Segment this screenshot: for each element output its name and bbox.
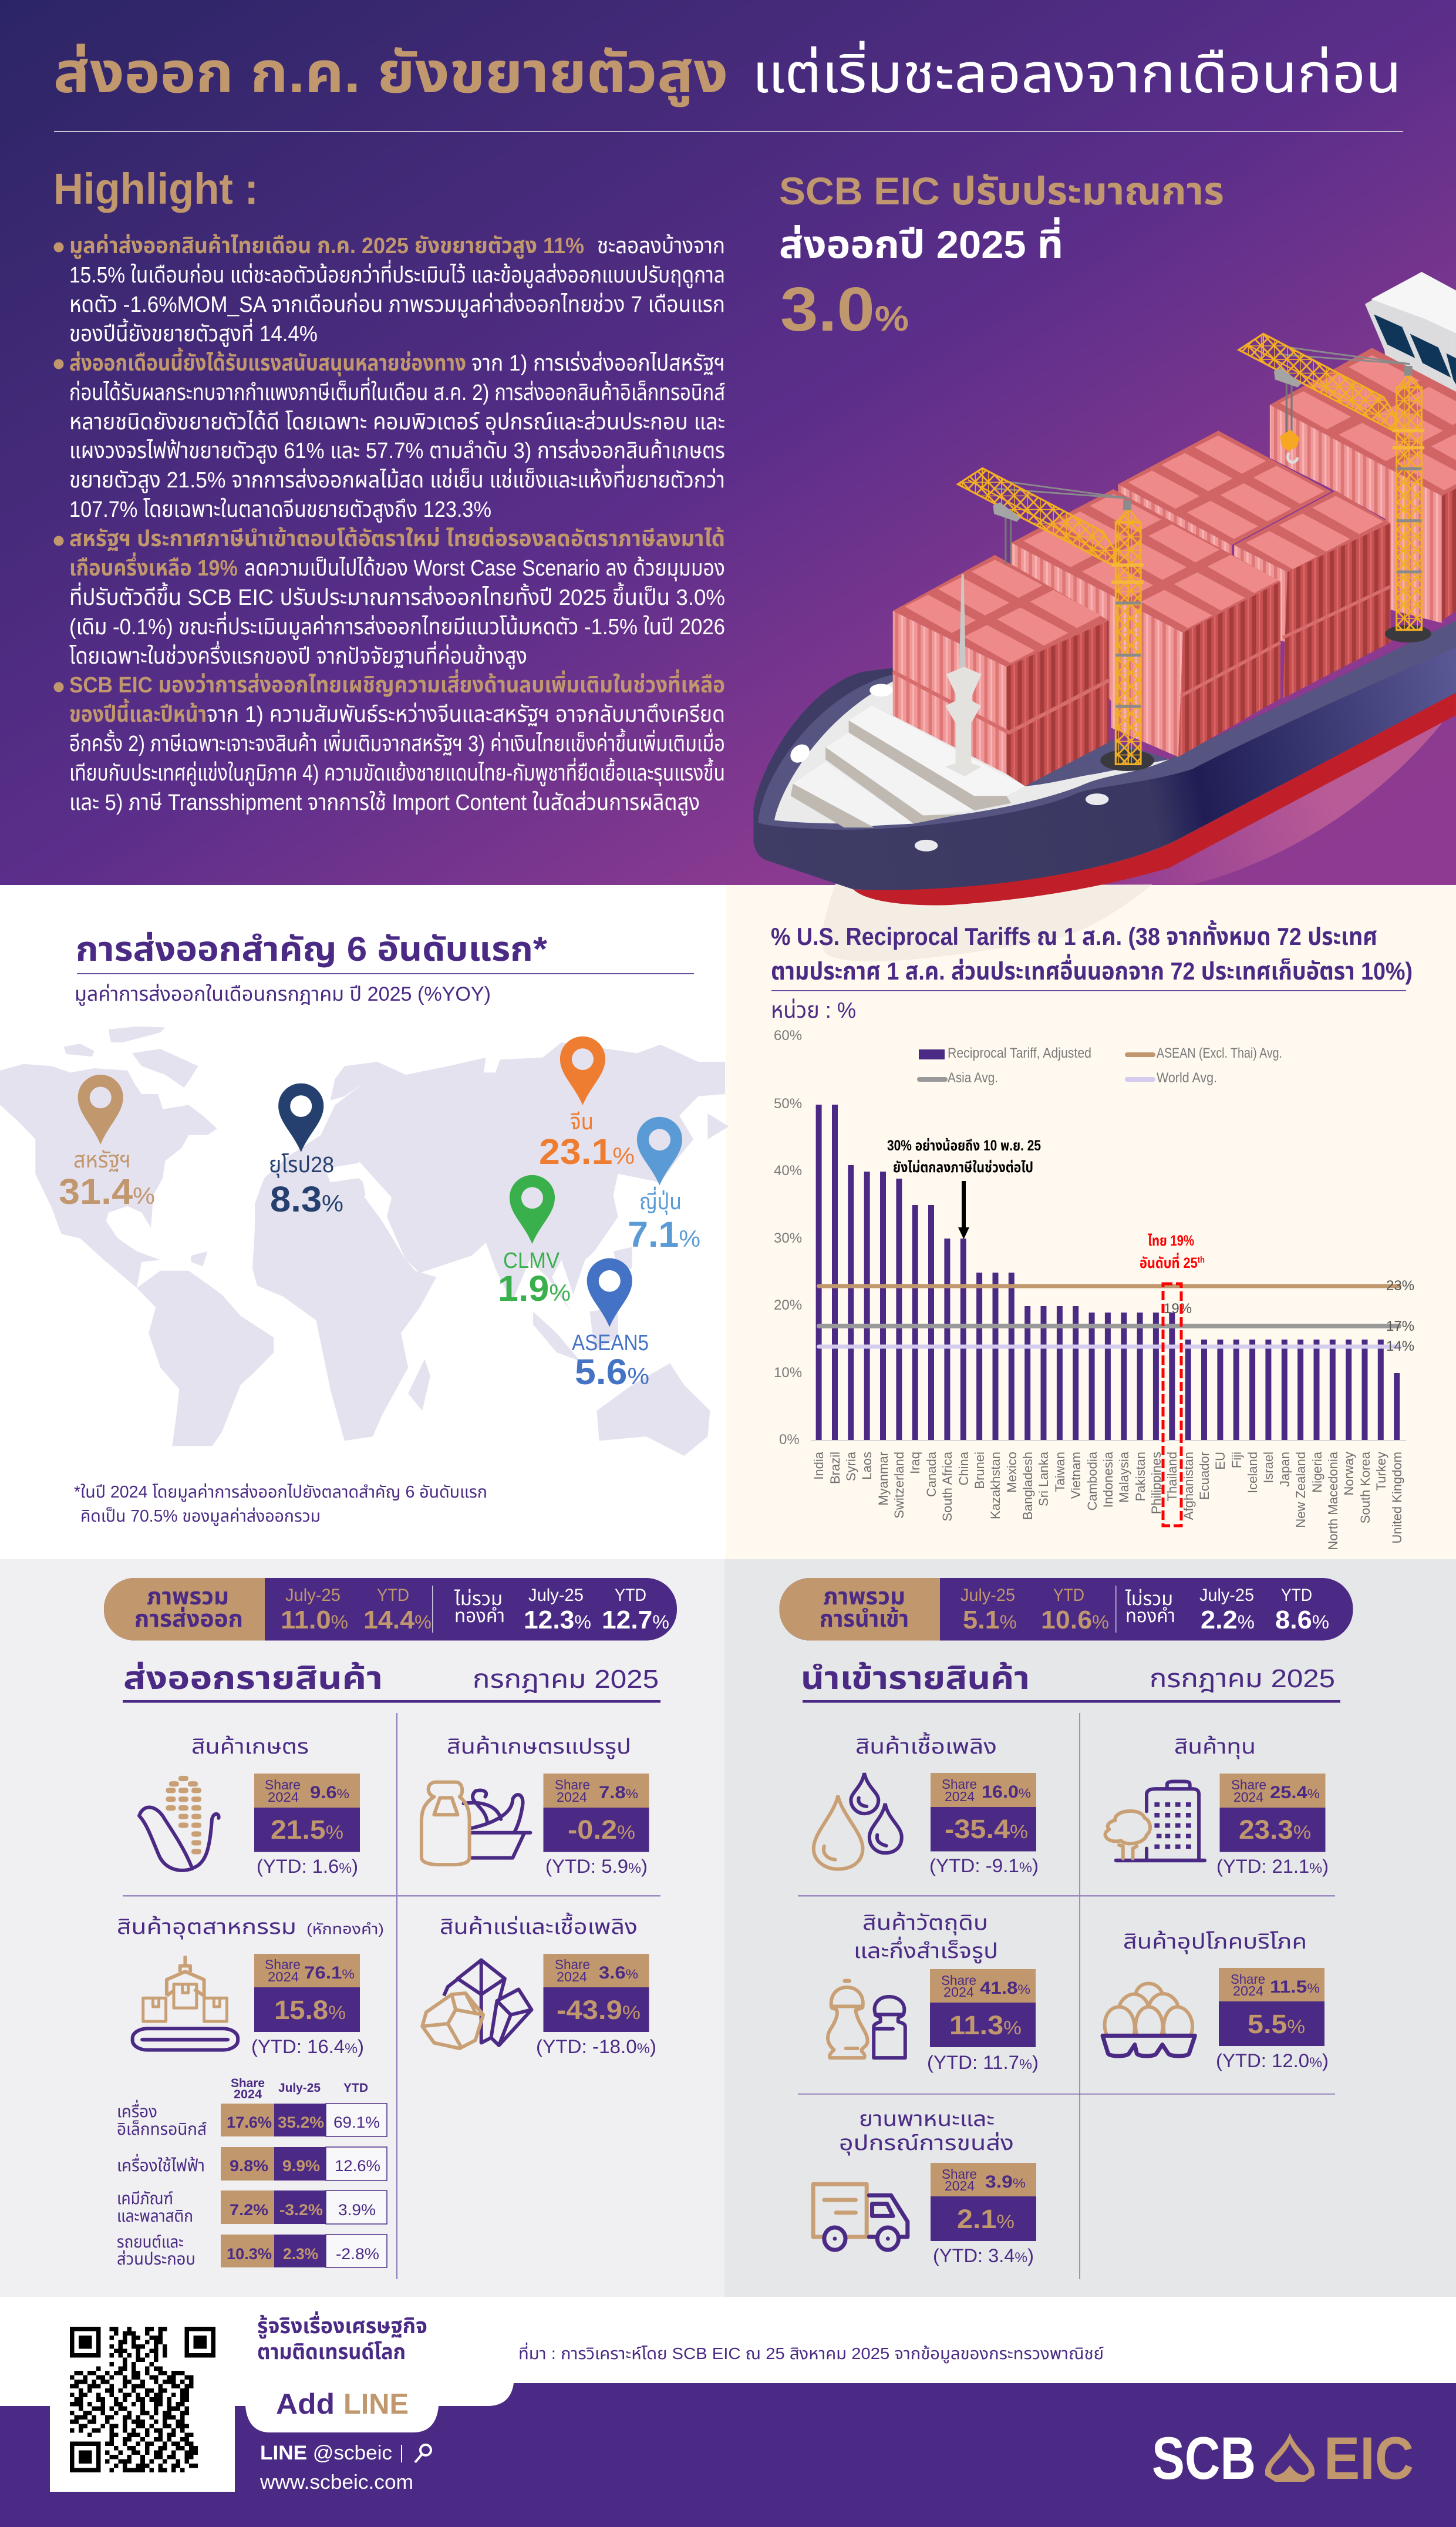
card: vehicles and transport: อุปกรณ์การขนส่ง [839, 2131, 1014, 2155]
x axis country labels: Nigeria [1310, 1451, 1324, 1493]
card: agricultural goods [139, 1734, 360, 1877]
text block: highlights [54, 234, 725, 816]
pill: export overview [104, 1578, 677, 1641]
card: capital goods [1106, 1734, 1329, 1877]
icon: bottle and fruit basket [422, 1782, 530, 1865]
share box: 2024 [1233, 1983, 1263, 1998]
legend: Reciprocal Tariff, Adjusted [948, 1045, 1091, 1061]
text block: highlights: อีกครั้ง 2) ภาษีเฉพาะเจาะจงสินค้า เพิ่มเติมจากสหรัฐฯ 3) ค่าเงินไทยแข็งค่าขึ้นเพิ่มเติมเมื่อ [69, 728, 725, 756]
text block: highlights: ของปีนี้และปีหน้า [69, 698, 207, 727]
table: industrial subcategories: July-25 [278, 2081, 321, 2095]
table: industrial subcategories: YTD [343, 2081, 368, 2095]
label: EU28: 8.3% [270, 1179, 343, 1219]
export grid rules [123, 1713, 660, 2279]
x axis country labels: Iceland [1245, 1452, 1260, 1493]
heading: imports by product: นำเข้ารายสินค้า [801, 1661, 1030, 1696]
panel: lower white and cream backgrounds [0, 885, 1456, 2527]
share box [536, 1954, 656, 2057]
pill: import overview: 10.6% [1041, 1606, 1109, 1634]
pill: export overview: July-25 [528, 1586, 584, 1605]
panel: top 6 export markets [0, 930, 729, 1526]
x axis country labels: New Zealand [1293, 1452, 1308, 1528]
card: industrial goods: (หักทองคำ) [306, 1921, 384, 1937]
label: USA: 31.4% [59, 1172, 155, 1212]
share box [931, 2163, 1036, 2266]
icon: conveyor with boxes [133, 1956, 238, 2050]
card: processed agricultural goods [422, 1734, 649, 1877]
text block: highlights: เทียบกับประเทศคู่แข่งในภูมิภาค 4) ความขัดแย้งชายแดนไทย-กัมพูชาที่ยืดเยื้อและรุนแรงขึ้น [69, 758, 725, 786]
share box: (YTD: -9.1%) [929, 1855, 1039, 1876]
table: industrial subcategories: 10.3% [227, 2245, 272, 2263]
annotation: Thailand highlight [1140, 1233, 1205, 1526]
share box: (YTD: 5.9%) [545, 1856, 648, 1877]
y axis labels: 10% [774, 1365, 802, 1381]
text block: highlights: SCB EIC มองว่าการส่งออกไทยเผชิญความเสี่ยงด้านลบเพิ่มเติมในช่วงที่เหลือ [69, 669, 725, 698]
text: add line: Add [276, 2388, 335, 2420]
card: industrial goods [117, 1914, 387, 2269]
pill: import overview [780, 1578, 1353, 1641]
text: follow trends [257, 2311, 427, 2364]
y axis labels: 50% [774, 1096, 802, 1112]
share box: 9.6% [310, 1783, 349, 1802]
share box: 41.8 % [980, 1978, 1030, 1998]
average lines: 23% [1386, 1278, 1414, 1294]
icon: corn [139, 1776, 219, 1870]
share box: Share [555, 1957, 590, 1972]
card: vehicles and transport: ยานพาหนะและ [859, 2107, 995, 2131]
illustration: container ship [753, 272, 1456, 961]
x axis country labels: Mexico [1005, 1452, 1019, 1493]
pill: import overview: ไม่รวม [1125, 1588, 1173, 1609]
share box: 3.6% [599, 1963, 638, 1983]
share box [254, 1774, 360, 1877]
pill: export overview: YTD [615, 1586, 646, 1605]
text block: highlights: หดตัว -1.6%MOM_SA จากเดือนก่อน ภาพรวมมูลค่าส่งออกไทยช่วง 7 เดือนแรก [69, 292, 725, 318]
table: industrial subcategories: 2024 [234, 2088, 262, 2101]
footnote: คิดเป็น 70.5% ของมูลค่าส่งออกรวม [80, 1507, 321, 1526]
label: ASEAN5: 5.6% [575, 1352, 649, 1392]
label: USA [59, 1148, 155, 1212]
text block: highlights: ขยายตัวสูง 21.5% จากการส่งออกผลไม้สด แช่เย็น แช่แข็งและแห้งที่ขยายตัวกว่า [69, 465, 725, 493]
table: industrial subcategories: 12.6% [335, 2157, 380, 2175]
share box [1216, 1774, 1329, 1877]
x axis country labels: Myanmar [876, 1452, 891, 1506]
title [53, 41, 1401, 107]
far containers [1270, 348, 1456, 623]
annotation: China 30% [887, 1138, 1041, 1239]
mast [945, 574, 982, 776]
x axis country labels: Turkey [1374, 1452, 1388, 1490]
table: industrial subcategories: อิเล็กทรอนิกส์ [117, 2120, 207, 2139]
table: industrial subcategories: 2.3% [283, 2245, 318, 2263]
text block: highlights: มูลค่าส่งออกสินค้าไทยเดือน ก.ค. 2025 ยังขยายตัวสูง 11% [69, 234, 584, 259]
text block: highlights: สหรัฐฯ ประกาศภาษีนำเข้าตอบโต้อัตราใหม่ ไทยต่อรองลดอัตราภาษีลงมาได้ [69, 527, 725, 551]
x axis country labels: Indonesia [1101, 1451, 1115, 1508]
table: industrial subcategories [117, 2077, 387, 2269]
text block: highlights: หลายชนิดยังขยายตัวได้ดี โดยเฉพาะ คอมพิวเตอร์ อุปกรณ์และส่วนประกอบ และ [69, 410, 725, 435]
map pins [78, 1037, 682, 1327]
share box: Share [1231, 1971, 1265, 1987]
legend: ASEAN (Excl. Thai) Avg. [1157, 1045, 1282, 1061]
share box: 5.5% [1248, 2009, 1305, 2039]
x axis country labels: Brunei [972, 1452, 987, 1489]
average lines [817, 1278, 1414, 1354]
logo: SCB EIC [1152, 2425, 1414, 2492]
share box: Share [265, 1777, 301, 1792]
share box [251, 1954, 364, 2057]
share box: 2024 [268, 1969, 299, 1984]
text block: highlights: จาก 1) การเร่งส่งออกไปสหรัฐฯ [471, 351, 725, 376]
pill: export overview: ไม่รวม [454, 1588, 503, 1609]
x axis country labels: Switzerland [892, 1452, 906, 1519]
x axis country labels: Brazil [828, 1452, 842, 1484]
mid containers [1011, 430, 1390, 757]
share box: (YTD: 12.0%) [1216, 2050, 1329, 2071]
share box: 2024 [557, 1789, 587, 1805]
share box [927, 1969, 1039, 2073]
share box: 25.4% [1270, 1783, 1320, 1802]
legend: World Avg. [1157, 1070, 1217, 1086]
pill: export overview: July-25 [285, 1586, 341, 1605]
pill: import overview: YTD [1281, 1586, 1312, 1605]
table: industrial subcategories: 7.2% [230, 2201, 268, 2219]
share box: 76.1 % [304, 1963, 355, 1983]
callout: forecast 3.0%: ส่งออกปี 2025 ที่ [779, 217, 1063, 266]
text: add line [276, 2388, 409, 2420]
footnote [74, 1483, 487, 1526]
card: minerals and fuels: สินค้าแร่และเชื้อเพลิง [440, 1912, 638, 1939]
x axis country labels: North Macedonia [1326, 1451, 1340, 1550]
logo: SCB EIC: SCB [1152, 2425, 1256, 2492]
label: Japan: 7.1% [628, 1214, 700, 1254]
hull [753, 621, 1456, 906]
share box: Share [265, 1957, 301, 1972]
share box: Share [941, 1973, 976, 1988]
x axis country labels [811, 1451, 1404, 1550]
label: CLMV [498, 1249, 571, 1308]
unit label: หน่วย : % [771, 998, 856, 1023]
panel: reciprocal tariffs chart [771, 920, 1414, 1550]
average lines: 17% [1386, 1318, 1414, 1334]
background: hero gradient [0, 0, 1456, 886]
pill: import overview: YTD [1053, 1586, 1084, 1605]
icon: building and tree [1106, 1781, 1206, 1862]
label: China: จีน [570, 1110, 594, 1135]
callout: forecast 3.0% [779, 169, 1224, 344]
card: raw materials: และกึ่งสำเร็จรูป [854, 1936, 998, 1963]
table: industrial subcategories: เครื่อง [117, 2099, 157, 2121]
text block: highlights: 15.5% ในเดือนก่อน แต่ชะลอตัวน้อยกว่าที่ประเมินไว้ และข้อมูลส่งออกแบบปรับฤดูกาล [69, 260, 725, 288]
x axis country labels: Iraq [908, 1452, 922, 1474]
pill: export overview: การส่งออก [134, 1606, 243, 1632]
text block: highlights: ที่ปรับตัวดีขึ้น SCB EIC ปรับประมาณการส่งออกไทยทั้งปี 2025 ขึ้นเป็น 3.0% [69, 582, 725, 610]
label: ASEAN5 [572, 1331, 649, 1392]
QR code [70, 2327, 215, 2472]
heading: imports by product [801, 1661, 1340, 1703]
heading: exports by product [123, 1661, 660, 1703]
subheading: มูลค่าการส่งออกในเดือนกรกฎาคม ปี 2025 (%YOY) [75, 983, 491, 1006]
x axis country labels: Vietnam [1069, 1452, 1083, 1499]
icon: crystals and rock [422, 1960, 531, 2048]
label: ASEAN5: ASEAN5 [572, 1331, 649, 1355]
card: fuel imports [814, 1732, 1039, 1876]
callout: forecast 3.0%: 3.0% [780, 275, 909, 344]
crane: rear with hook [1239, 334, 1431, 642]
table: industrial subcategories: ส่วนประกอบ [117, 2250, 196, 2269]
text block: highlights: ก่อนได้รับผลกระทบจากกำแพงภาษีเต็มที่ในเดือน ส.ค. 2) การส่งออกสินค้าอิเล็กทรอนิกส์ [69, 377, 725, 405]
text block: highlights: ชะลอลงบ้างจาก [597, 234, 725, 258]
x axis country labels: Malaysia [1117, 1451, 1131, 1503]
table: industrial subcategories: รถยนต์และ [117, 2233, 184, 2252]
heading: highlight: Highlight : [53, 164, 258, 213]
share box: 16.0% [982, 1782, 1031, 1802]
share box: 2024 [1233, 1789, 1263, 1805]
label: China: 23.1% [539, 1132, 635, 1172]
table: industrial subcategories: 35.2% [278, 2114, 324, 2131]
share box: (YTD: 21.1%) [1216, 1856, 1329, 1877]
heading [771, 920, 1413, 985]
legend [917, 1045, 1282, 1086]
share box: Share [555, 1777, 590, 1792]
x axis country labels: India [811, 1451, 826, 1480]
text block: highlights: ลดความเป็นไปได้ของ Worst Case Scenario ลง ด้วยมุมมอง [244, 556, 725, 581]
pill: import overview: ทองคำ [1125, 1605, 1175, 1626]
share box: Share [1231, 1777, 1266, 1792]
pill: import overview: 2.2% [1201, 1606, 1255, 1634]
text: follow trends: รู้จริงเรื่องเศรษฐกิจ [257, 2311, 427, 2338]
pill: export overview: YTD [377, 1586, 409, 1605]
text: line id and website: www.scbeic.com [259, 2471, 413, 2494]
label: EU28: ยุโรป28 [269, 1153, 334, 1178]
title: ส่งออก ก.ค. ยังขยายตัวสูง [53, 41, 728, 107]
table: industrial subcategories: และพลาสติก [117, 2207, 193, 2226]
average lines: 19% [1164, 1301, 1192, 1317]
table: industrial subcategories: 9.8% [230, 2157, 268, 2175]
icon: delivery truck [813, 2184, 908, 2250]
share box: -35.4 % [945, 1814, 1028, 1844]
label: USA: สหรัฐฯ [73, 1148, 131, 1173]
share box [544, 1774, 649, 1877]
card: capital goods: สินค้าทุน [1174, 1734, 1256, 1759]
pill: export overview: 11.0% [281, 1606, 348, 1634]
label: CLMV: CLMV [503, 1249, 560, 1273]
heading: exports by product: กรกฎาคม 2025 [473, 1665, 659, 1694]
pill: import overview: July-25 [1199, 1586, 1254, 1605]
text: line id and website [259, 2442, 431, 2494]
card: fuel imports: สินค้าเชื้อเพลิง [855, 1732, 997, 1758]
import grid rules [798, 1713, 1335, 2279]
text block: highlights: เกือบครึ่งเหลือ 19% [69, 552, 238, 581]
world map [0, 1027, 729, 1456]
annotation: China 30%: ยังไม่ตกลงภาษีในช่วงต่อไป [893, 1159, 1033, 1176]
share box: 23.3% [1239, 1815, 1311, 1845]
bar chart [811, 1105, 1406, 1441]
share box: 2024 [268, 1789, 299, 1805]
x axis country labels: Fiji [1229, 1452, 1244, 1468]
share box: 2.1% [957, 2204, 1015, 2234]
share box: 11.3% [949, 2010, 1022, 2040]
deck steps [791, 706, 1025, 827]
x axis country labels: Syria [844, 1451, 858, 1481]
x axis country labels: Ecuador [1197, 1452, 1212, 1500]
front containers [893, 555, 1108, 786]
footnote: *ในปี 2024 โดยมูลค่าการส่งออกไปยังตลาดสำคัญ 6 อันดับแรก [74, 1483, 487, 1502]
text: line id and website: LINE @scbeic [260, 2442, 392, 2464]
text block: highlights: (เดิม -0.1%) ขณะที่ประเมินมูลค่าการส่งออกไทยมีแนวโน้มหดตัว -1.5% ในปี 2026 [69, 611, 725, 640]
x axis country labels: Laos [860, 1452, 874, 1480]
text block: highlights: โดยเฉพาะในช่วงครึ่งแรกของปี จากปัจจัยฐานที่ค่อนข้างสูง [69, 641, 527, 669]
card: raw materials [828, 1910, 1039, 2073]
icon: fuel drops [814, 1773, 902, 1869]
table: industrial subcategories: 17.6% [227, 2114, 272, 2131]
share box [929, 1773, 1039, 1876]
share box: 7.8% [599, 1783, 638, 1802]
card: vehicles and transport [813, 2107, 1036, 2266]
share box: (YTD: 3.4%) [933, 2245, 1034, 2266]
card: raw materials: สินค้าวัตถุดิบ [862, 1910, 988, 1935]
share box [1216, 1968, 1329, 2071]
logo: SCB EIC: EIC [1324, 2425, 1414, 2492]
callout: forecast 3.0%: SCB EIC ปรับประมาณการ [779, 169, 1224, 213]
text: add line: LINE [343, 2388, 409, 2420]
icon: bottles [828, 1979, 905, 2058]
share box: Share [942, 2166, 977, 2182]
share box: Share [942, 1776, 977, 1792]
share box: 15.8% [274, 1995, 346, 2025]
card: minerals and fuels [422, 1912, 656, 2057]
annotation: Thailand highlight: อันดับที่ 25 [1140, 1255, 1206, 1271]
x axis country labels: EU [1213, 1452, 1228, 1470]
heading: exports by product: ส่งออกรายสินค้า [123, 1661, 383, 1696]
pill: import overview: การนำเข้า [820, 1606, 909, 1632]
table: industrial subcategories: เคมีภัณฑ์ [117, 2189, 173, 2208]
x axis country labels: Sri Lanka [1036, 1451, 1051, 1506]
x axis country labels: Cambodia [1085, 1451, 1100, 1510]
table: industrial subcategories: เครื่องใช้ไฟฟ้า [117, 2153, 205, 2175]
icon: egg tray [1103, 1983, 1195, 2056]
table: industrial subcategories: -3.2% [279, 2201, 323, 2219]
card: consumer goods: สินค้าอุปโภคบริโภค [1123, 1929, 1307, 1954]
x axis country labels: Philippines [1149, 1452, 1164, 1514]
card: processed agricultural goods: สินค้าเกษตรแปรรูป [447, 1734, 631, 1759]
pill: export overview: ภาพรวม [147, 1584, 229, 1610]
x axis country labels: Norway [1342, 1452, 1356, 1496]
text block: highlights: แผงวงจรไฟฟ้าขยายตัวสูง 61% และ 57.7% ตามลำดับ 3) การส่งออกสินค้าเกษตร [69, 439, 725, 464]
share box: 21.5% [271, 1815, 343, 1845]
annotation: Thailand highlight: th [1198, 1255, 1205, 1265]
text block: highlights: 107.7% โดยเฉพาะในตลาดจีนขยายตัวสูงถึง 123.3% [69, 497, 491, 523]
share box: (YTD: 16.4%) [251, 2036, 364, 2057]
pill: import overview: 5.1% [963, 1606, 1017, 1634]
y axis labels: 40% [774, 1163, 802, 1179]
x axis country labels: Taiwan [1053, 1452, 1067, 1492]
table: industrial subcategories: Share [231, 2077, 265, 2090]
share box: (YTD: 1.6%) [257, 1856, 358, 1877]
share box: (YTD: 11.7%) [927, 2052, 1039, 2073]
card: agricultural goods: สินค้าเกษตร [191, 1734, 309, 1758]
legend: Asia Avg. [948, 1070, 998, 1086]
card: industrial goods: สินค้าอุตสาหกรรม [117, 1914, 296, 1939]
y axis labels: 0% [779, 1432, 800, 1448]
table: industrial subcategories: 9.9% [282, 2157, 320, 2175]
heading: % U.S. Reciprocal Tariffs ณ 1 ส.ค. (38 จากทั้งหมด 72 ประเทศ [771, 920, 1377, 950]
card: consumer goods [1103, 1929, 1329, 2071]
x axis country labels: South Korea [1358, 1451, 1373, 1523]
pill: import overview: ภาพรวม [823, 1584, 905, 1610]
annotation: China 30%: 30% อย่างน้อยถึง 10 พ.ย. 25 [887, 1138, 1041, 1154]
share box: 3.9% [985, 2172, 1026, 2192]
label: EU28 [269, 1153, 343, 1219]
share box: 2024 [557, 1969, 587, 1984]
x axis country labels: Pakistan [1133, 1452, 1148, 1501]
label: CLMV: 1.9% [498, 1268, 571, 1308]
share box: -0.2% [568, 1815, 635, 1845]
average lines: 14% [1386, 1338, 1414, 1354]
text: follow trends: ตามติดเทรนด์โลก [257, 2340, 406, 2364]
crane: front [958, 468, 1154, 771]
label: China [539, 1110, 635, 1172]
pill: export overview: 14.4% [363, 1606, 432, 1634]
y axis labels [774, 1028, 802, 1448]
pill: export overview: 12.7% [602, 1606, 669, 1634]
bridge cabin [1365, 272, 1456, 395]
x axis country labels: Israel [1261, 1452, 1276, 1483]
text block: highlights: และ 5) ภาษี Transshipment จากการใช้ Import Content ในสัดส่วนการผลิตสูง [69, 790, 700, 816]
label: Japan: ญี่ปุ่น [639, 1186, 682, 1215]
text block: highlights: ส่งออกเดือนนี้ยังได้รับแรงสนับสนุนหลายช่องทาง [69, 347, 466, 376]
pill: import overview: 8.6% [1275, 1606, 1329, 1634]
heading: การส่งออกสำคัญ 6 อันดับแรก* [76, 930, 547, 968]
text block: highlights: จาก 1) ความสัมพันธ์ระหว่างจีนและสหรัฐฯ อาจกลับมาตึงเครียด [207, 702, 725, 727]
pill: export overview: 12.3% [524, 1606, 591, 1634]
title: แต่เริ่มชะลอลงจากเดือนก่อน [752, 41, 1401, 104]
x axis country labels: South Africa [940, 1451, 955, 1522]
x axis country labels: Thailand [1165, 1452, 1179, 1501]
share box: 2024 [945, 1789, 975, 1804]
share box: (YTD: -18.0 %) [536, 2036, 656, 2057]
x axis country labels: China [956, 1451, 971, 1485]
x axis country labels: Afghanistan [1181, 1452, 1196, 1520]
x axis country labels: Canada [924, 1451, 939, 1497]
y axis labels: 60% [774, 1028, 802, 1044]
y axis labels: 20% [774, 1297, 802, 1313]
source note: ที่มา : การวิเคราะห์โดย SCB EIC ณ 25 สิงหาคม 2025 จากข้อมูลของกระทรวงพาณิชย์ [518, 2342, 1104, 2364]
footer band [0, 2383, 1456, 2527]
x axis country labels: Bangladesh [1020, 1452, 1035, 1520]
x axis country labels: United Kingdom [1390, 1452, 1404, 1544]
table: industrial subcategories: 69.1% [333, 2114, 380, 2131]
pill: import overview: July-25 [960, 1586, 1015, 1605]
share box: 11.5 % [1270, 1977, 1320, 1997]
label: Japan [628, 1186, 700, 1254]
y axis labels: 30% [774, 1230, 802, 1246]
share box: -43.9 % [557, 1995, 641, 2025]
x axis country labels: Japan [1278, 1452, 1292, 1487]
share box: 2024 [943, 1984, 974, 2000]
table: industrial subcategories: -2.8% [336, 2245, 379, 2263]
text block: highlights: ของปีนี้ยังขยายตัวสูงที่ 14.4% [69, 318, 318, 347]
table: industrial subcategories: 3.9% [338, 2201, 376, 2219]
annotation: Thailand highlight: ไทย 19% [1148, 1233, 1194, 1249]
x axis country labels: Kazakhstan [988, 1452, 1003, 1519]
pill: export overview: ทองคำ [454, 1605, 505, 1626]
heading: imports by product: กรกฎาคม 2025 [1150, 1664, 1335, 1693]
share box: 2024 [945, 2178, 975, 2193]
